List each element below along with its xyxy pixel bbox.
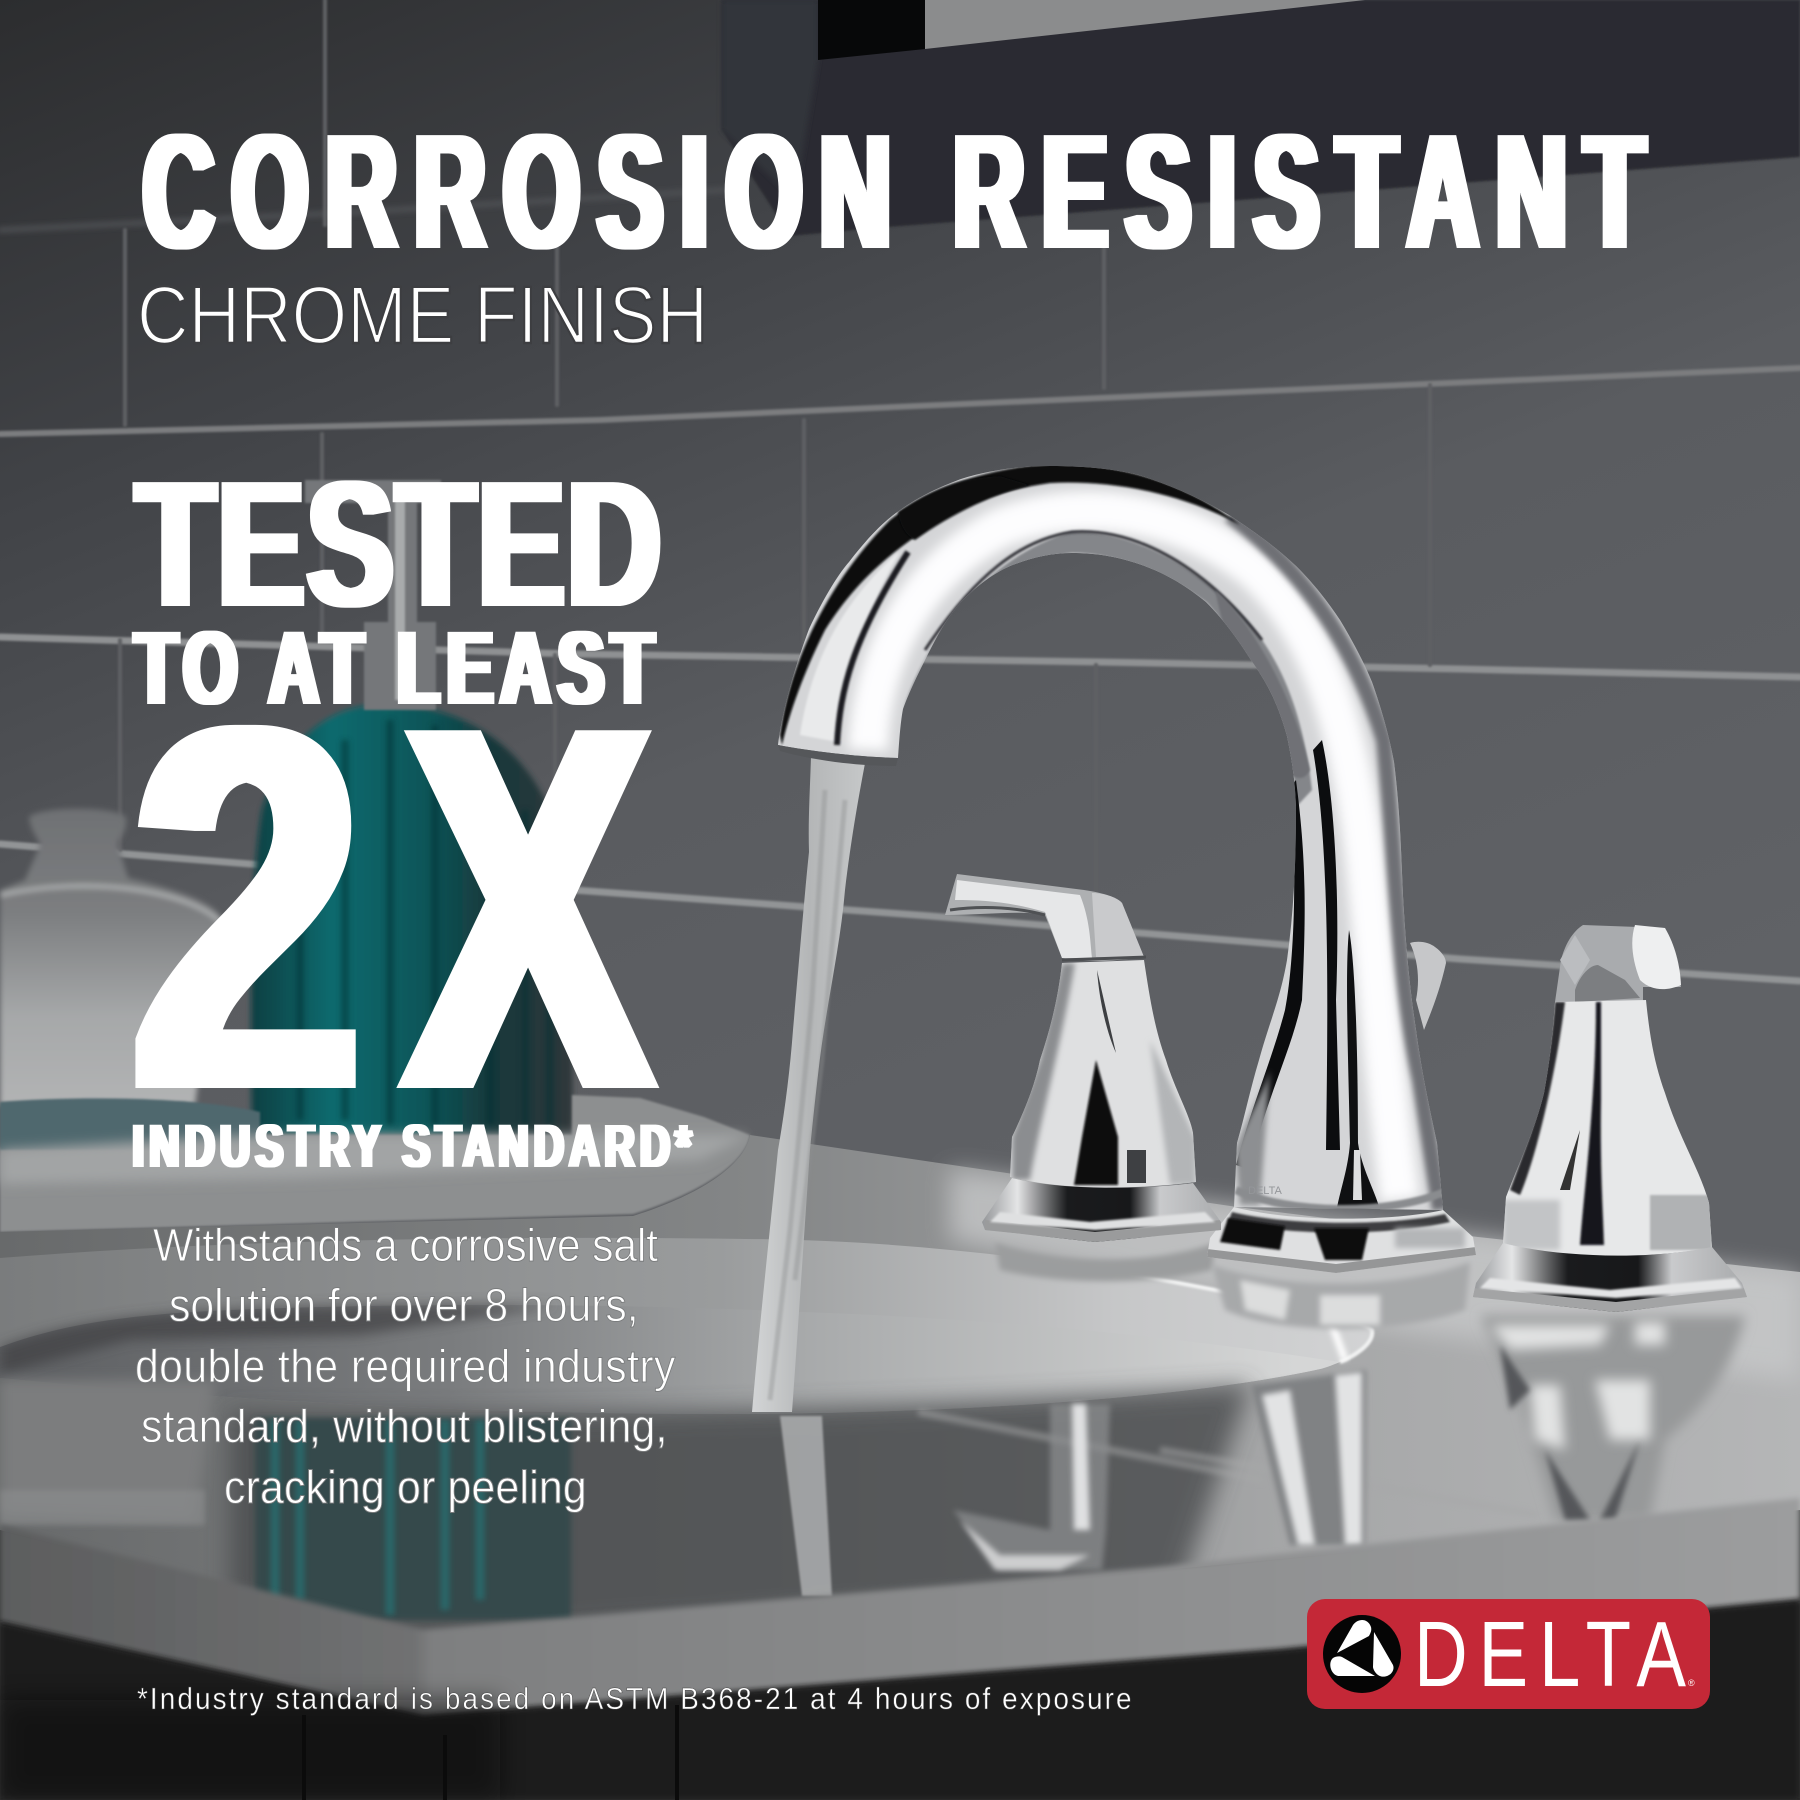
handle base [1470, 1240, 1750, 1315]
body text: solution for over 8 hours, [169, 1281, 639, 1331]
handle lever [1555, 925, 1681, 1002]
claim figure: 2X: X [403, 619, 655, 1199]
claim line: industry standard: INDUSTRY STANDARD* [132, 1113, 692, 1181]
stem lower shade [1235, 1070, 1270, 1205]
tip reflection [800, 552, 900, 742]
claim figure: 2X: 2 [131, 618, 362, 1198]
claim: tested to at least 2x [131, 444, 692, 1199]
background: cabinet [0, 1600, 1800, 1800]
illustration: faucet spout [770, 460, 1450, 1220]
subtitle: CHROME FINISH [137, 270, 708, 361]
claim line: to at least: TO AT LEAST [135, 608, 654, 726]
footnote: *Industry standard is based on ASTM B368-21 at 4 hours of exposure [137, 1682, 1131, 1716]
claim line: tested: TESTED [136, 444, 661, 645]
stem reflection [1336, 930, 1381, 1213]
handle bell [1010, 960, 1196, 1188]
background: teal soap bottle [251, 480, 573, 1135]
illustration: left handle [945, 874, 1230, 1245]
inner arch band [903, 532, 1312, 807]
body text: cracking or peeling [224, 1463, 587, 1513]
background: countertop and sink [0, 1135, 1800, 1640]
outer edge shade [1230, 515, 1440, 1210]
stem inner black edge [1236, 780, 1305, 1170]
body text: Withstands a corrosive salt [153, 1221, 659, 1271]
background: tray with cloth [0, 1095, 750, 1232]
title: CORROSION RESISTANT [143, 100, 1645, 283]
logo registered mark: ® [1688, 1678, 1695, 1688]
handle lever [945, 874, 1144, 961]
spout highlight [868, 511, 1400, 1200]
illustration: faucet base [1207, 1207, 1476, 1273]
illustration: water stream [752, 756, 866, 1596]
stem dark stripe [1313, 740, 1340, 1150]
sink basin [0, 1305, 1340, 1414]
background: counter front edge [0, 1498, 1800, 1716]
illustration: back lever [1410, 942, 1446, 1030]
body text: double the required industry [135, 1342, 676, 1392]
background: reflections in counter [0, 1243, 1745, 1620]
logo wordmark: DELTA [1414, 1602, 1686, 1706]
illustration: spout aerator [778, 745, 898, 766]
stem brand mark: DELTA [1248, 1185, 1282, 1197]
handle bell [1500, 1000, 1720, 1260]
spout dark crescent [780, 464, 1240, 745]
background: wall mirror [722, 0, 1800, 236]
body text [135, 1221, 676, 1513]
logo: Delta [1307, 1599, 1710, 1709]
claim figure: 2X [131, 618, 655, 1199]
illustration: right handle [1470, 925, 1750, 1315]
tip dark line [837, 552, 908, 745]
logo icon: delta triangle [1323, 1615, 1401, 1693]
reflection drop [1215, 590, 1310, 778]
handle base [982, 1178, 1221, 1242]
spout body [770, 460, 1450, 1220]
counter shade in front of sink [230, 1385, 1250, 1640]
body text: standard, without blistering, [141, 1402, 667, 1452]
background: glass jar [0, 809, 223, 1105]
background: tiled wall [0, 0, 1800, 1300]
sink rim [0, 1238, 1372, 1414]
